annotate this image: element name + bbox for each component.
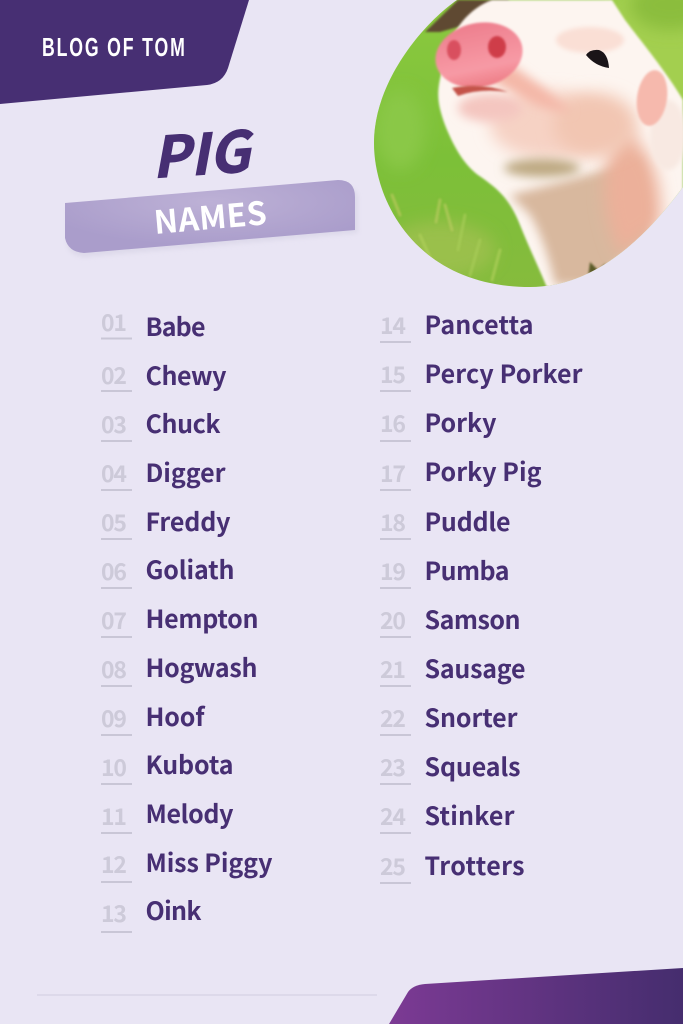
- item 23: Squeals: [424, 748, 520, 784]
- ear: [636, 69, 668, 127]
- item 24: [380, 797, 515, 833]
- item 25: Trotters: [424, 847, 524, 883]
- item 05: Freddy: [146, 503, 231, 539]
- item 02: Chewy: [146, 357, 227, 393]
- item 19: 19: [380, 553, 406, 587]
- eye: [586, 50, 609, 68]
- item 09: [101, 698, 206, 735]
- item 01: [101, 304, 206, 344]
- footer banner: [389, 968, 683, 1024]
- item 02: 02: [101, 357, 127, 391]
- item 15: Percy Porker: [424, 355, 583, 391]
- ribbon label: NAMES: [152, 188, 268, 244]
- item 08: 08: [101, 651, 127, 685]
- item 25: 25: [380, 848, 406, 882]
- photo: piglet in grass: [370, 0, 683, 290]
- item 14: 14: [380, 307, 406, 341]
- item 20: [380, 601, 520, 637]
- item 23: [380, 748, 520, 784]
- item 12: [101, 844, 273, 882]
- item 18: Puddle: [424, 503, 510, 539]
- item 13: 13: [101, 895, 127, 929]
- item 09: Hoof: [146, 698, 206, 734]
- item 24: Stinker: [424, 797, 515, 833]
- item 11: [101, 795, 234, 833]
- item 22: 22: [380, 700, 406, 734]
- item 12: 12: [101, 846, 127, 880]
- item 22: Snorter: [424, 699, 518, 735]
- item 03: [101, 405, 220, 441]
- item 13: Oink: [146, 892, 202, 928]
- item 25: [380, 847, 524, 883]
- item 04: Digger: [146, 454, 226, 490]
- item 05: 05: [101, 504, 127, 538]
- item 08: Hogwash: [146, 649, 258, 685]
- item 20: Samson: [424, 601, 520, 637]
- item 11: Melody: [146, 795, 234, 831]
- item 03: 03: [101, 406, 127, 440]
- snout: [434, 21, 564, 112]
- item 10: 10: [101, 749, 127, 783]
- item 19: Pumba: [424, 552, 510, 588]
- item 02: [101, 357, 227, 393]
- names ribbon: [65, 180, 358, 257]
- item 07: Hempton: [146, 600, 258, 636]
- item 23: 23: [380, 749, 406, 783]
- item 07: 07: [101, 602, 127, 636]
- item 21: Sausage: [424, 650, 526, 686]
- item 17: Porky Pig: [424, 453, 542, 489]
- item 13: [101, 892, 202, 932]
- header banner: [0, 0, 249, 104]
- item 19: [380, 552, 510, 588]
- item 17: 17: [380, 455, 406, 489]
- item 03: Chuck: [146, 405, 220, 441]
- item 08: [101, 649, 258, 686]
- item 01: 01: [101, 304, 127, 338]
- item 14: Pancetta: [424, 306, 534, 342]
- item 05: [101, 503, 231, 539]
- name list: right column: [380, 306, 583, 883]
- item 04: [101, 454, 226, 490]
- item 21: 21: [380, 651, 406, 685]
- item 10: Kubota: [146, 746, 234, 782]
- item 06: 06: [101, 553, 127, 587]
- item 06: [101, 551, 234, 588]
- item 12: Miss Piggy: [146, 844, 273, 880]
- item 15: 15: [380, 356, 406, 390]
- item 06: Goliath: [146, 551, 234, 587]
- item 16: [380, 404, 497, 441]
- brand name: BLOG OF TOM: [42, 33, 185, 62]
- item 22: [380, 699, 518, 735]
- item 01: Babe: [146, 308, 206, 344]
- item 10: [101, 746, 234, 784]
- item 24: 24: [380, 798, 406, 832]
- item 04: 04: [101, 455, 127, 489]
- item 07: [101, 600, 258, 637]
- item 09: 09: [101, 700, 127, 734]
- item 11: 11: [101, 798, 127, 832]
- item 18: [380, 503, 510, 539]
- item 16: 16: [380, 405, 406, 439]
- name list: left column: [101, 304, 273, 932]
- title: pig: PIG: [149, 107, 257, 195]
- item 21: [380, 650, 526, 686]
- item 18: 18: [380, 504, 406, 538]
- item 16: Porky: [424, 404, 497, 440]
- item 20: 20: [380, 602, 406, 636]
